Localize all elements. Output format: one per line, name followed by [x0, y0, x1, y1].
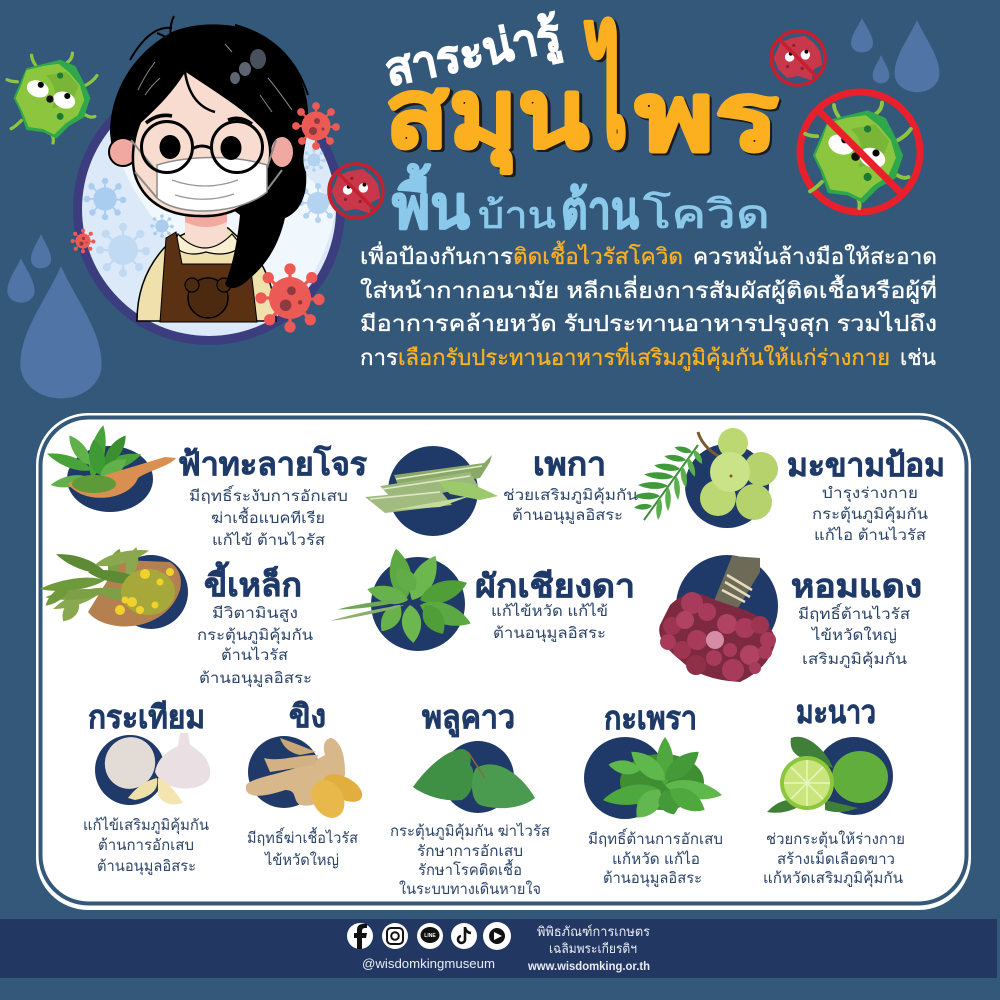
neck	[185, 212, 227, 248]
herb: holy basil	[584, 700, 724, 888]
icon: facebook	[347, 923, 373, 949]
herb image: andrographis	[45, 424, 176, 512]
text block: introduction: ใส่หน้ากากอนามัย หลีกเลี่ยงการสัมผัสผู้ติดเชื้อหรือผู้ที่	[360, 275, 937, 304]
title: subtitle: ต้าน	[561, 182, 639, 240]
description: shallot: ไข้หวัดใหญ่	[811, 626, 897, 644]
ears	[109, 138, 137, 166]
description: andrographis: แก้ไข้ ต้านไวรัส	[212, 531, 325, 549]
herb image: chiang da	[330, 547, 474, 651]
text block: introduction: ติดเชื้อไวรัสโควิด	[513, 241, 683, 269]
text block: introduction: เพื่อป้องกันการ	[360, 241, 513, 269]
description: andrographis: มีฤทธิ์ระงับการอักเสบ	[189, 485, 348, 505]
description: garlic: ต้านอนุมูลอิสระ	[97, 858, 196, 876]
mask	[157, 158, 267, 211]
herb image: ginger	[246, 736, 367, 824]
icon: tiktok	[451, 923, 477, 949]
description: cassia: ต้านอนุมูลอิสระ	[199, 670, 312, 688]
hair	[110, 24, 308, 288]
title: herbs: สมุน	[385, 61, 589, 174]
heading: lime: มะนาว	[796, 694, 876, 730]
herb image: plu kaow	[413, 741, 535, 813]
heading: gooseberry: มะขามป้อม	[787, 447, 945, 483]
description: shallot: มีฤทธิ์ต้านไวรัส	[798, 603, 910, 623]
footer handle: @wisdomkingmuseum	[362, 956, 495, 971]
description: holy basil: แก้หวัด แก้ไอ	[612, 850, 700, 868]
heading: plu kaow: พลูคาว	[422, 699, 515, 738]
description: cassia: มีวิตามินสูง	[212, 605, 298, 622]
description: gooseberry	[812, 485, 928, 544]
description: gooseberry: กระตุ้นภูมิคุ้มกัน	[812, 506, 928, 524]
description: lime: สร้างเม็ดเลือดขาว	[777, 849, 895, 868]
heading: pheka: เพกา	[533, 446, 606, 482]
description: chiang da: ต้านอนุมูลอิสระ	[493, 625, 606, 643]
heading: holy basil: กะเพรา	[604, 700, 697, 736]
icon: prohibited red virus top	[771, 31, 825, 85]
herb: lime	[763, 694, 905, 888]
herb image: garlic	[95, 729, 210, 805]
illustration: girl with mask	[73, 16, 345, 345]
icon: water drops left	[7, 234, 102, 398]
description: gooseberry: แก้ไอ ต้านไวรัส	[814, 526, 926, 544]
icon: youtube	[483, 922, 511, 950]
description: gooseberry: บำรุงร่างกาย	[822, 485, 918, 503]
herb image: shallot	[659, 555, 778, 682]
description: ginger	[247, 827, 358, 869]
description: chiang da: แก้ไข้หวัด แก้ไข้	[491, 602, 608, 620]
heading: andrographis: ฟ้าทะลายโจร	[178, 445, 367, 482]
description: andrographis: ฆ่าเชื้อแบคทีเรีย	[211, 507, 325, 527]
herb: chiang da	[330, 547, 635, 651]
herb: andrographis	[45, 424, 367, 549]
description: pheka: ต้านอนุมูลอิสระ	[512, 507, 623, 525]
title: herbs: พร	[637, 66, 781, 173]
title: herbs	[385, 19, 781, 177]
title: subtitle: โควิด	[643, 192, 770, 237]
description: ginger: มีฤทธิ์ฆ่าเชื้อไวรัส	[247, 827, 358, 847]
eyes	[160, 135, 180, 159]
glasses	[142, 122, 192, 172]
icon: instagram	[382, 923, 408, 949]
heading: shallot: หอมแดง	[791, 568, 922, 604]
herb image: gooseberry	[634, 428, 778, 528]
heading: cassia: ขี้เหล็ก	[204, 561, 302, 603]
text block: introduction	[360, 241, 937, 371]
description: andrographis	[189, 485, 348, 549]
herb: cassia	[39, 545, 313, 688]
description: plu kaow: รักษาการอักเสบ	[417, 843, 523, 860]
title: herbs: สมุน	[388, 63, 592, 176]
description: plu kaow: กระตุ้นภูมิคุ้มกัน ฆ่าไวรัส	[390, 822, 550, 841]
footer organisation: www.wisdomking.or.th	[527, 959, 650, 973]
description: shallot: เสริมภูมิคุ้มกัน	[802, 651, 907, 669]
panel: herbs	[36, 413, 971, 910]
footer organisation: เฉลิมพระเกียรติฯ	[549, 941, 637, 956]
description: lime	[763, 830, 905, 888]
herb image: pheka	[365, 446, 498, 536]
description: garlic	[83, 816, 209, 876]
herb: shallot	[659, 555, 922, 682]
title: subtitle	[392, 163, 770, 241]
collar	[174, 234, 242, 254]
herb image: lime	[767, 737, 893, 815]
icon: water drops right	[851, 18, 939, 92]
herb: garlic	[83, 699, 210, 876]
herb: indian gooseberry	[634, 428, 945, 544]
title: herbs: ไ	[584, 19, 627, 175]
title: herbs: พร	[635, 64, 779, 171]
heading: chiang da: ผักเชียงดา	[475, 568, 635, 604]
apron	[160, 232, 257, 322]
description: garlic: ต้านการอักเสบ	[98, 837, 194, 854]
title: subtitle: บ้าน	[478, 195, 556, 237]
icon: green virus	[7, 53, 97, 143]
title: herbs: ไ	[587, 21, 630, 177]
text block: introduction: การ	[360, 345, 398, 370]
description: cassia: กระตุ้นภูมิคุ้มกัน	[197, 627, 313, 645]
description: cassia: ต้านไวรัส	[221, 646, 288, 664]
text block: introduction: เช่น	[900, 345, 936, 370]
herb: pheka	[365, 446, 638, 536]
text block: introduction: ควรหมั่นล้างมือให้สะอาด	[693, 241, 937, 269]
description: chiang da	[491, 602, 608, 643]
title: subtitle: พื้น	[392, 163, 470, 241]
herb image: cassia	[39, 545, 188, 629]
description: cassia	[197, 605, 313, 688]
heading: garlic: กระเทียม	[88, 699, 205, 735]
description: plu kaow: รักษาโรคติดเชื้อ	[418, 859, 522, 879]
herb image: holy basil	[584, 737, 724, 824]
icon: red viruses around girl	[71, 103, 339, 331]
body	[137, 228, 276, 321]
footer organisation: พิพิธภัณฑ์การเกษตร	[537, 924, 650, 939]
footer organisation	[527, 924, 650, 973]
title: sara na ru: สาระน่ารู้	[380, 8, 566, 99]
description: pheka: ช่วยเสริมภูมิคุ้มกัน	[503, 487, 638, 505]
description: holy basil	[588, 828, 723, 888]
description: plu kaow: ในระบบทางเดินหายใจ	[399, 880, 541, 898]
icon: prohibited green virus	[800, 92, 920, 212]
herb: plu kaow	[390, 699, 550, 898]
heading: ginger: ขิง	[289, 698, 326, 734]
description: lime: แก้หวัดเสริมภูมิคุ้มกัน	[763, 870, 903, 888]
icon: line	[417, 923, 443, 949]
description: shallot	[798, 603, 910, 669]
text block: introduction: เลือกรับประทานอาหารที่เสริมภูมิคุ้มกันให้แก่ร่างกาย	[398, 342, 890, 371]
description: pheka	[503, 487, 638, 525]
text block: introduction: มีอาการคล้ายหวัด รับประทานอาหารปรุงสุก รวมไปถึง	[360, 311, 937, 337]
face	[133, 70, 270, 216]
description: holy basil: มีฤทธิ์ต้านการอักเสบ	[588, 828, 723, 848]
description: lime: ช่วยกระตุ้นให้ร่างกาย	[766, 830, 905, 849]
description: garlic: แก้ไข้เสริมภูมิคุ้มกัน	[83, 816, 209, 835]
icon: line: LINE	[424, 933, 436, 939]
description: plu kaow	[390, 822, 550, 898]
footer band	[0, 919, 997, 978]
description: holy basil: ต้านอนุมูลอิสระ	[603, 870, 702, 888]
icon: prohibited red virus small	[329, 164, 383, 218]
description: ginger: ไข้หวัดใหญ่	[264, 851, 339, 869]
herb: ginger	[246, 698, 367, 869]
